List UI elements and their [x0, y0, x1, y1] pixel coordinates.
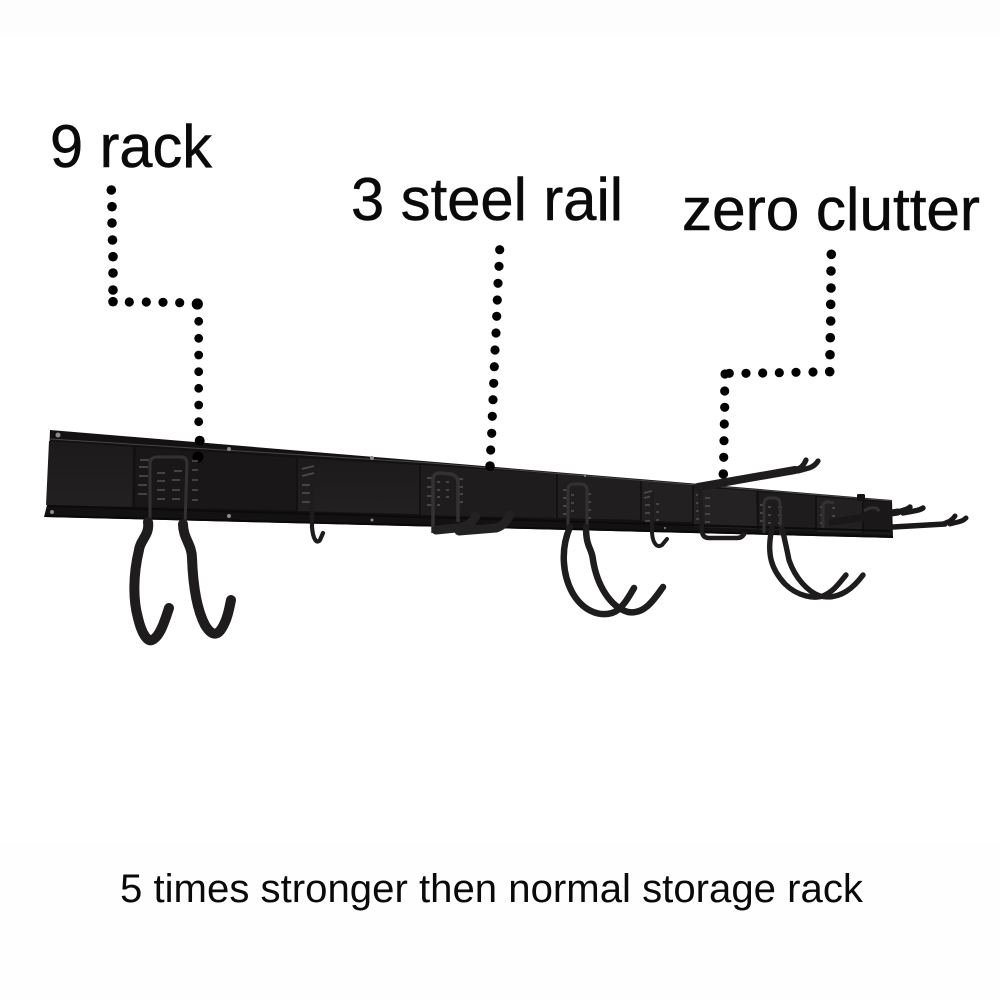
label: 9 rack: 9 rack [50, 113, 213, 180]
clip on rail end [857, 494, 865, 501]
hook: flat fork [436, 515, 510, 531]
caption: 5 times stronger then normal storage rack [120, 867, 863, 911]
label: 3 steel rail: 3 steel rail [351, 166, 623, 233]
hook: right fork arms [832, 507, 966, 527]
bracket teeth [138, 460, 835, 523]
hook: thin double J [770, 528, 863, 597]
steel rail [44, 430, 893, 538]
hook: medium double J [564, 527, 663, 614]
bracket frames [150, 457, 879, 535]
dotted leader: 3 steel rail [485, 245, 504, 471]
hook: upward fork arm [698, 460, 818, 487]
dotted leader: zero clutter [718, 250, 836, 479]
label: zero clutter: zero clutter [682, 176, 980, 243]
bracket ring [700, 487, 745, 538]
hook: large double J [134, 522, 231, 640]
rack assembly [44, 185, 966, 640]
rail screws [50, 432, 666, 529]
hook: small single right [652, 494, 667, 546]
dotted leader: 9 rack [106, 185, 205, 462]
hook: small single [312, 482, 323, 541]
